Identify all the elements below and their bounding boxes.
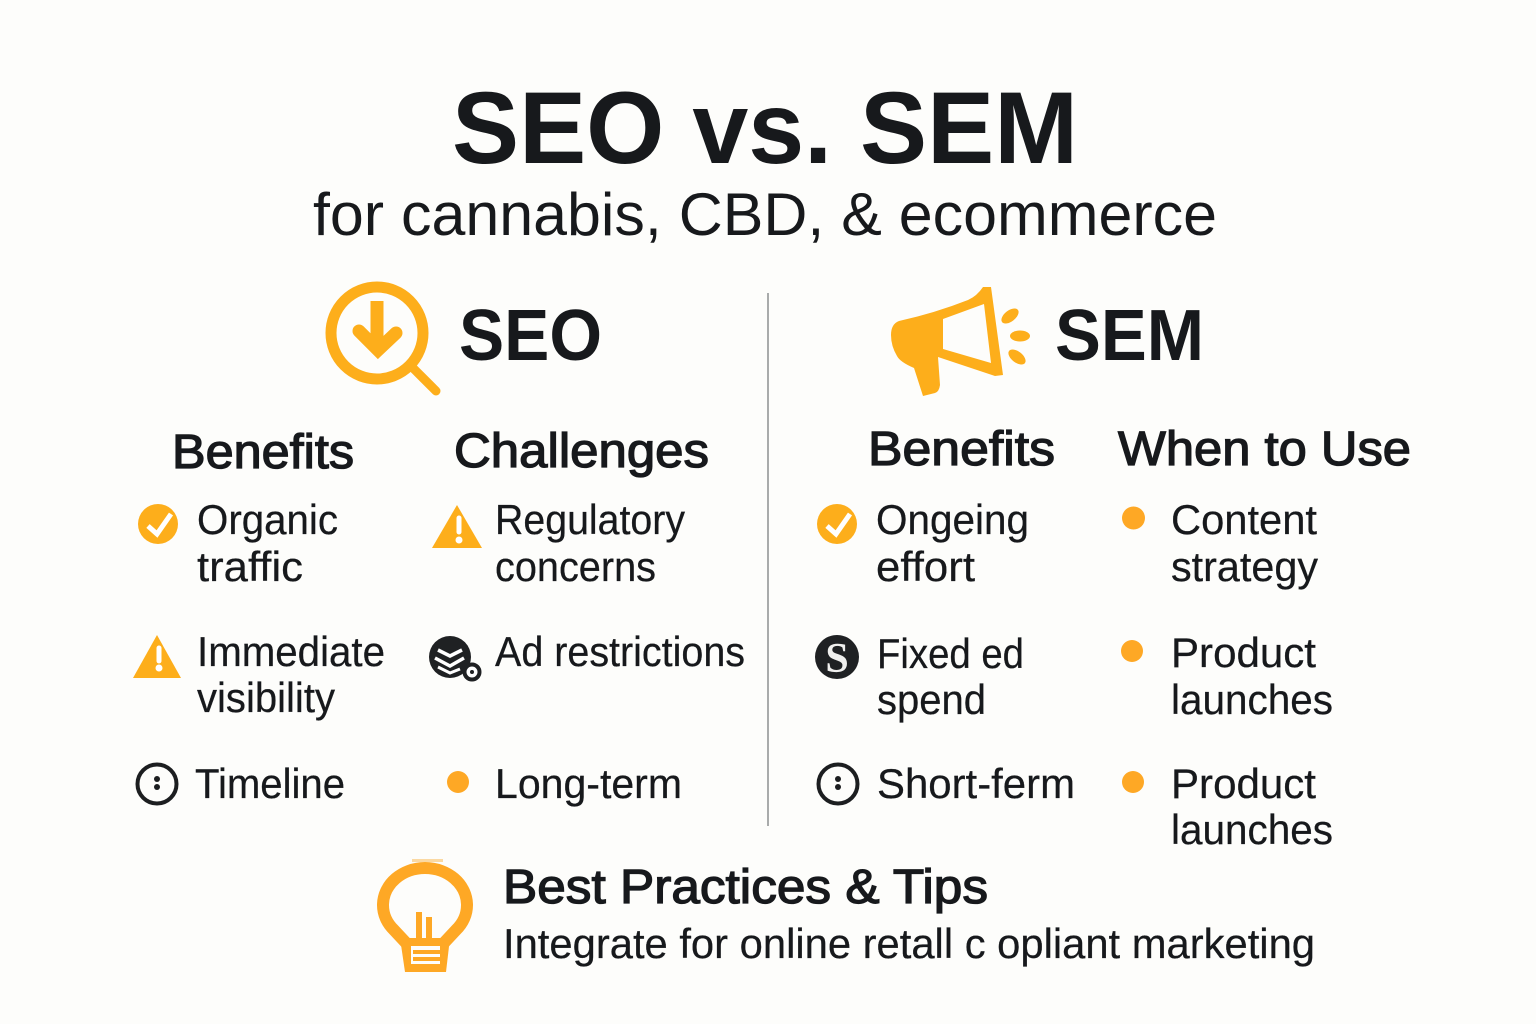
- icon: warning triangle: [133, 635, 181, 678]
- panel: SEM: [815, 287, 1411, 853]
- icon: light bulb: [383, 859, 467, 972]
- icon: stacked coins: [429, 636, 480, 680]
- label: short-term: Short-ferm: [877, 760, 1075, 807]
- subtitle: for cannabis, CBD, & ecommerce: [313, 181, 1217, 248]
- label: ongoing effort: Ongeing: [876, 496, 1029, 543]
- item: fixed ad spend: [815, 630, 1024, 723]
- icon: warning triangle: [432, 505, 482, 548]
- icon: bullet: [1122, 506, 1145, 530]
- column: when to use: [1118, 423, 1411, 853]
- label: organic traffic: Organic: [197, 496, 338, 543]
- item: immediate visibility: [133, 628, 385, 721]
- item: ad restrictions: [429, 628, 745, 680]
- icon: check badge: [138, 504, 178, 544]
- icon: bullet: [1121, 640, 1143, 662]
- heading: challenges: Challenges: [454, 425, 709, 478]
- label: ongoing effort: effort: [876, 543, 975, 590]
- label: timeline: Timeline: [195, 760, 345, 807]
- icon: check badge: [817, 504, 857, 544]
- heading: benefits: Benefits: [868, 423, 1055, 476]
- item: regulatory concerns: [432, 496, 685, 590]
- panel: best practices: [383, 859, 1315, 972]
- item: content strategy: [1122, 496, 1318, 590]
- label: long-term: Long-term: [495, 760, 682, 807]
- label: product launches: launches: [1171, 676, 1333, 723]
- column: SEO benefits: [133, 426, 385, 807]
- icon: bullet: [1122, 771, 1144, 793]
- icon: magnifier with down arrow: [331, 287, 436, 391]
- item: long-term: [447, 760, 682, 807]
- label: regulatory concerns: concerns: [495, 543, 656, 590]
- item: short-term: [818, 760, 1075, 807]
- item: product launches repeat: [1122, 760, 1333, 853]
- icon: timeline circle: [138, 764, 176, 804]
- heading: best practices and tips: Best Practices & Tips: [503, 861, 988, 914]
- icon: megaphone: [891, 287, 1030, 396]
- text: integrate tip: Integrate for online retall c opliant marketing: [503, 920, 1315, 967]
- label: organic traffic: traffic: [197, 543, 303, 590]
- icon: dollar coin: S: [825, 636, 849, 682]
- icon: dollar coin: [815, 635, 859, 682]
- title: SEO vs. SEM: [452, 71, 1078, 185]
- heading: SEM: SEM: [1055, 296, 1204, 376]
- item: ongoing effort: [817, 496, 1029, 590]
- item: timeline: [138, 760, 345, 807]
- label: product launches repeat: Product: [1171, 760, 1316, 807]
- heading: SEO: SEO: [459, 296, 602, 376]
- item: product launches: [1121, 629, 1333, 723]
- label: product launches repeat: launches: [1171, 806, 1333, 853]
- label: fixed ad spend: spend: [877, 676, 986, 723]
- label: immediate visibility: Immediate: [197, 628, 385, 675]
- column: SEO challenges: [429, 425, 745, 807]
- label: product launches: Product: [1171, 629, 1316, 676]
- heading: benefits: Benefits: [172, 426, 354, 479]
- icon: bullet: [447, 771, 469, 793]
- label: regulatory concerns: Regulatory: [495, 496, 685, 543]
- column: SEM benefits: [815, 423, 1075, 807]
- label: immediate visibility: visibility: [197, 674, 335, 721]
- label: fixed ad spend: Fixed ed: [877, 630, 1024, 677]
- label: ad restrictions: Ad restrictions: [495, 628, 745, 675]
- label: content strategy: strategy: [1171, 543, 1318, 590]
- heading: when to use: When to Use: [1118, 423, 1411, 476]
- item: organic traffic: [138, 496, 338, 590]
- panel: SEO: [133, 287, 745, 807]
- icon: timeline circle: [818, 764, 858, 804]
- label: content strategy: Content: [1171, 496, 1317, 543]
